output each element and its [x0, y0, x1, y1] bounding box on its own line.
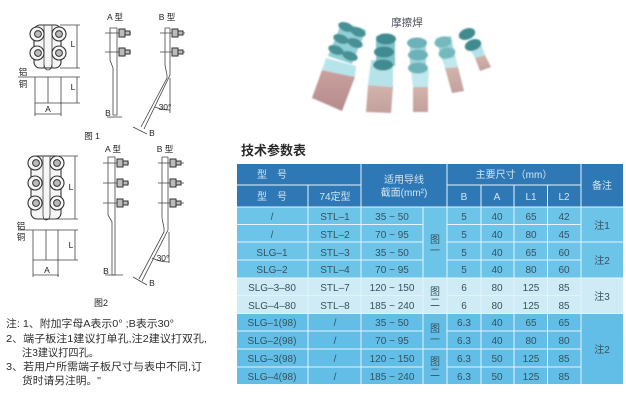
- row 9: /: [334, 354, 337, 365]
- row 9: 85: [558, 354, 570, 365]
- side view B type, figure 1: 30°: [159, 102, 171, 112]
- table header: L1: [525, 192, 537, 203]
- row 8: SLG–2(98): [248, 336, 296, 347]
- row 7: /: [334, 318, 337, 329]
- row 1: 35 ~ 50: [375, 212, 409, 223]
- row 4: 80: [525, 265, 537, 276]
- remarks column: 注1: [594, 219, 610, 232]
- side view B type, figure 2: 30°: [157, 253, 169, 263]
- row 5: STL–7: [320, 283, 350, 294]
- figure 1: drawing of connector with two-row bolts: [18, 12, 185, 141]
- note 3 continued: 货时请另注明。": [22, 374, 101, 387]
- row 1: [271, 212, 570, 223]
- table header: [257, 168, 612, 203]
- notes text block: [6, 317, 207, 387]
- row 7: SLG–1(98): [248, 318, 296, 329]
- table header: 截面(mm²): [381, 186, 427, 199]
- row 6: 125: [523, 301, 540, 312]
- row 4: 60: [558, 265, 570, 276]
- terminal 2: [366, 34, 396, 113]
- figure reference column: 一: [430, 335, 440, 346]
- row 2: 70 ~ 95: [375, 230, 409, 241]
- row 3: 35 ~ 50: [375, 248, 409, 259]
- row 6: SLG–4–80: [248, 301, 296, 312]
- figure 2: drawing of connector with three-row bolts: [17, 144, 184, 308]
- terminal 4: [434, 35, 464, 93]
- figure reference column: 二: [430, 368, 440, 379]
- row 6: 185 ~ 240: [370, 301, 415, 312]
- row 1: 65: [525, 212, 537, 223]
- row 10: 185 ~ 240: [370, 372, 415, 383]
- note 2: 2、端子板注1建议打单孔,注2建议打双孔,: [6, 332, 207, 345]
- row 5: 125: [523, 283, 540, 294]
- remarks column: [594, 219, 610, 356]
- table header: 型 号: [257, 190, 287, 203]
- row 4: 40: [491, 265, 503, 276]
- front view, figure 1: 铜: [19, 79, 27, 89]
- figure reference column: 图: [430, 356, 440, 368]
- row 9: 120 ~ 150: [370, 354, 415, 365]
- row 3: 65: [525, 248, 537, 259]
- figure reference column: 一: [430, 246, 440, 257]
- row 2: [271, 230, 570, 241]
- row 1: 40: [491, 212, 503, 223]
- figure reference column: 图: [430, 286, 440, 298]
- row 1: STL–1: [320, 212, 350, 223]
- table header: A: [494, 192, 501, 203]
- side view A type, figure 2: B: [103, 266, 109, 276]
- side view B type, figure 2: B: [149, 278, 155, 288]
- row 7: 65: [558, 318, 570, 329]
- row 10: /: [334, 372, 337, 383]
- row 8: 70 ~ 95: [375, 336, 409, 347]
- row 2: STL–2: [320, 230, 350, 241]
- row 2: 5: [461, 230, 467, 241]
- row 8: 40: [491, 336, 503, 347]
- row 1: 5: [461, 212, 467, 223]
- row 6: 85: [558, 301, 570, 312]
- row 10: 85: [558, 372, 570, 383]
- row 8: 80: [525, 336, 537, 347]
- row 1: 42: [558, 212, 570, 223]
- row 4: 70 ~ 95: [375, 265, 409, 276]
- table header: 74定型: [319, 190, 351, 203]
- row 7: [248, 318, 570, 329]
- row 5: 85: [558, 283, 570, 294]
- table header: 适用导线: [384, 173, 424, 186]
- photo caption: 摩擦焊: [391, 16, 423, 29]
- front view, figure 2: L: [69, 240, 74, 250]
- figure reference column: 图: [430, 323, 440, 335]
- row 5: 6: [461, 283, 467, 294]
- table rows: [248, 212, 570, 383]
- remarks column: 注2: [594, 343, 610, 356]
- table header: 主要尺寸（mm）: [476, 168, 552, 181]
- table header: 备注: [592, 179, 612, 192]
- row 8: 80: [558, 336, 570, 347]
- row 8: /: [334, 336, 337, 347]
- front view, figure 1: L: [71, 39, 76, 49]
- figure 1 caption: 图 1: [84, 131, 100, 141]
- front view, figure 2: [17, 156, 78, 277]
- front view, figure 1: 铝: [19, 67, 27, 77]
- row 10: 125: [523, 372, 540, 383]
- side view A type, figure 2: [103, 144, 129, 276]
- row 6: STL–8: [320, 301, 350, 312]
- table backgrounds: [237, 164, 623, 384]
- side view A type, figure 1: B: [105, 108, 111, 118]
- note 3: 3、若用户所需端子板尺寸与表中不同,订: [6, 360, 203, 373]
- row 3: 5: [461, 248, 467, 259]
- row 9: 6.3: [457, 354, 471, 365]
- side view B type, figure 2: [133, 144, 184, 288]
- front view, figure 1: A: [45, 104, 51, 114]
- front view, figure 2: 铝: [17, 221, 25, 231]
- figure 2 caption: 图2: [94, 298, 108, 308]
- row 2: 80: [525, 230, 537, 241]
- row 9: [248, 354, 570, 365]
- row 5: [248, 283, 570, 294]
- remarks column: 注3: [594, 290, 610, 303]
- table grid lines: [237, 164, 623, 384]
- row 8: 6.3: [457, 336, 471, 347]
- row 3: SLG–1: [256, 248, 288, 259]
- terminal 3: [407, 38, 429, 112]
- table header: 型 号: [257, 168, 287, 181]
- row 3: 60: [558, 248, 570, 259]
- side view A type, figure 1: A 型: [107, 12, 124, 22]
- row 9: 125: [523, 354, 540, 365]
- row 3: [256, 248, 570, 259]
- row 6: [248, 301, 570, 312]
- side view B type, figure 2: B 型: [157, 144, 174, 154]
- technical parameter table: [237, 164, 623, 384]
- table title: 技术参数表: [241, 143, 306, 158]
- row 4: 5: [461, 265, 467, 276]
- row 5: 120 ~ 150: [370, 283, 415, 294]
- row 5: SLG–3–80: [248, 283, 296, 294]
- row 9: 50: [491, 354, 503, 365]
- note 1: 注: 1、附加字母A表示0° ;B表示30°: [6, 317, 174, 330]
- row 2: 45: [558, 230, 570, 241]
- row 3: STL–3: [320, 248, 350, 259]
- row 2: 40: [491, 230, 503, 241]
- front view, figure 2: L: [69, 182, 74, 192]
- table header: L2: [558, 192, 570, 203]
- side view B type, figure 1: [133, 12, 185, 138]
- terminal 5: [457, 26, 491, 71]
- row 4: STL–4: [320, 265, 350, 276]
- front view, figure 1: [18, 25, 80, 116]
- side view B type, figure 1: B: [149, 128, 155, 138]
- figure reference column: [430, 234, 440, 379]
- row 7: 6.3: [457, 318, 471, 329]
- row 4: [256, 265, 570, 276]
- product photo: friction-welded terminals: [312, 16, 491, 113]
- row 7: 40: [491, 318, 503, 329]
- row 1: /: [271, 212, 274, 223]
- side view A type, figure 1: [105, 12, 131, 118]
- terminal 1: [312, 20, 367, 111]
- row 6: 80: [491, 301, 503, 312]
- front view, figure 2: 铜: [17, 232, 25, 242]
- row 7: 65: [525, 318, 537, 329]
- side view A type, figure 2: A 型: [105, 144, 122, 154]
- front view, figure 1: L: [71, 82, 76, 92]
- row 10: SLG–4(98): [248, 372, 296, 383]
- row 2: /: [271, 230, 274, 241]
- row 9: SLG–3(98): [248, 354, 296, 365]
- front view, figure 2: A: [44, 265, 50, 275]
- side view B type, figure 1: B 型: [159, 12, 176, 22]
- row 10: [248, 372, 570, 383]
- row 3: 40: [491, 248, 503, 259]
- row 10: 50: [491, 372, 503, 383]
- row 7: 35 ~ 50: [375, 318, 409, 329]
- row 10: 6.3: [457, 372, 471, 383]
- row 6: 6: [461, 301, 467, 312]
- row 5: 80: [491, 283, 503, 294]
- table header: B: [461, 192, 468, 203]
- row 4: SLG–2: [256, 265, 288, 276]
- figure reference column: 图: [430, 234, 440, 246]
- figure reference column: 二: [430, 298, 440, 309]
- row 8: [248, 336, 570, 347]
- note 2 continued: 注3建议打四孔。: [22, 346, 99, 359]
- remarks column: 注2: [594, 254, 610, 267]
